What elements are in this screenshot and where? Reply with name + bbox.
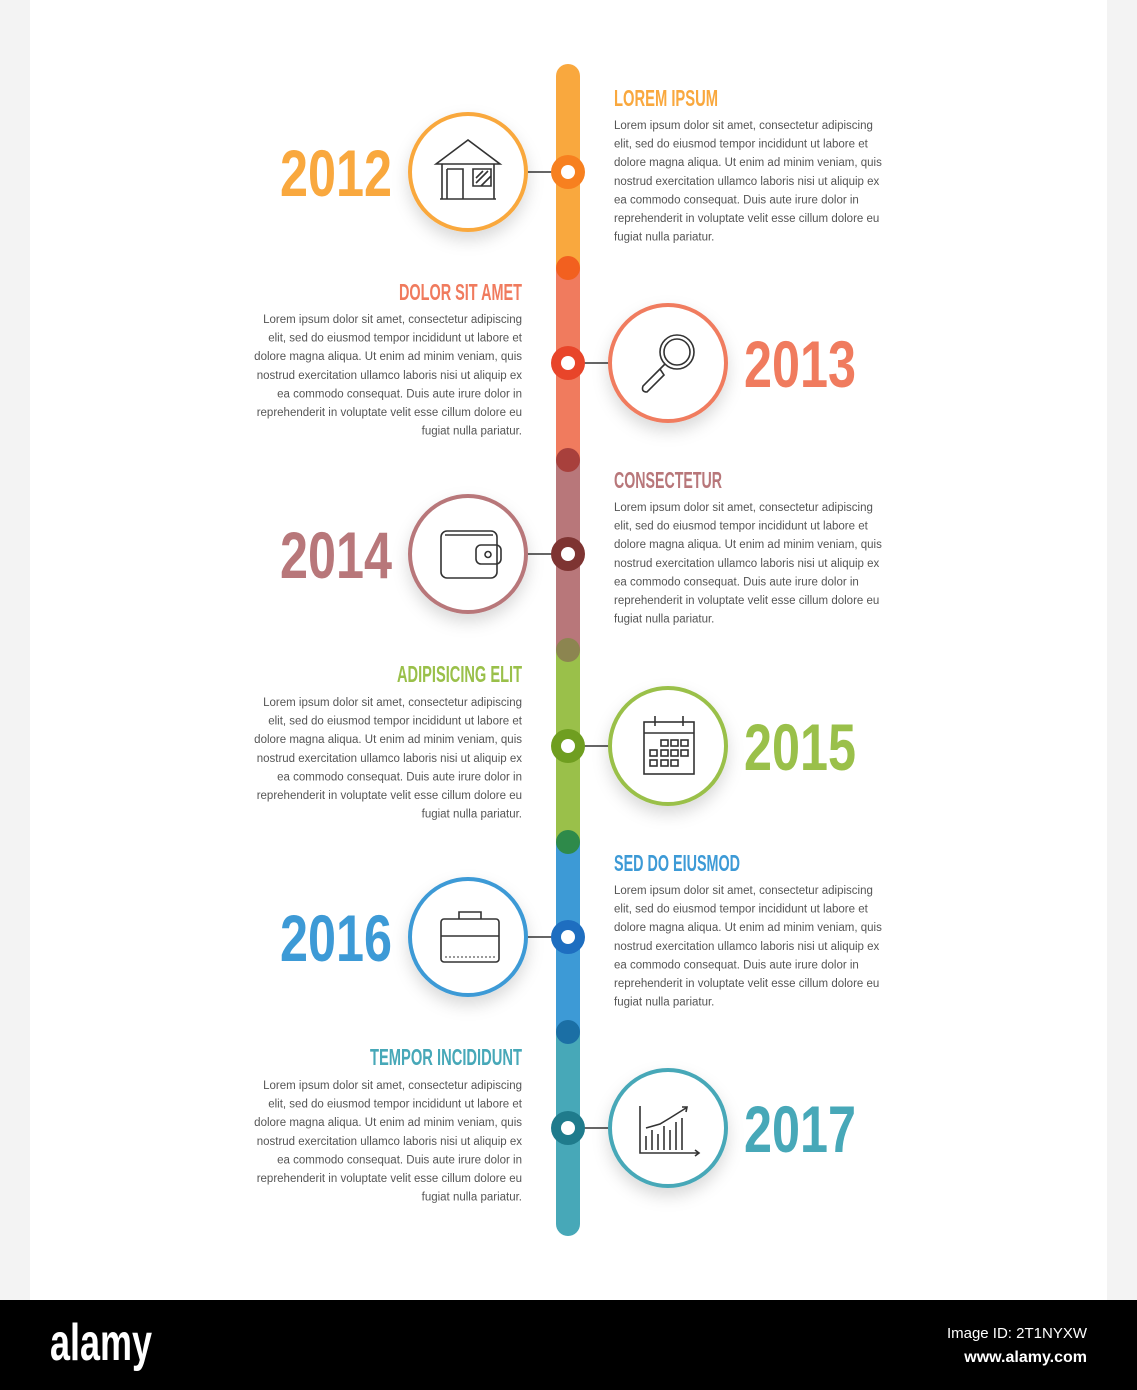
body text: reprehenderit in voluptate velit esse cillum dolore eu bbox=[257, 407, 522, 419]
heading: SED DO EIUSMOD bbox=[614, 850, 740, 876]
body text: reprehenderit in voluptate velit esse cillum dolore eu bbox=[257, 790, 522, 802]
heading: TEMPOR INCIDIDUNT bbox=[370, 1044, 522, 1070]
image id bbox=[947, 1325, 1087, 1366]
image id: www.alamy.com bbox=[964, 1349, 1087, 1366]
body text: Lorem ipsum dolor sit amet, consectetur adipiscing bbox=[263, 1080, 522, 1092]
body text: dolore magna aliqua. Ut enim ad minim veniam, quis bbox=[614, 539, 882, 551]
body text: reprehenderit in voluptate velit esse cillum dolore eu bbox=[614, 978, 879, 990]
body text: elit, sed do eiusmod tempor incididunt ut labore et bbox=[268, 1099, 523, 1111]
body text: fugiat nulla pariatur. bbox=[614, 232, 714, 244]
footer bar bbox=[0, 1300, 1137, 1390]
body text: dolore magna aliqua. Ut enim ad minim veniam, quis bbox=[614, 922, 882, 934]
image id: Image ID: 2T1NYXW bbox=[947, 1325, 1087, 1342]
body text: nostrud exercitation ullamco laboris nisi ut aliquip ex bbox=[257, 753, 522, 765]
body text: Lorem ipsum dolor sit amet, consectetur adipiscing bbox=[263, 697, 522, 709]
timeline nodes bbox=[551, 155, 585, 1145]
item 2013 bbox=[254, 279, 856, 438]
body text: fugiat nulla pariatur. bbox=[422, 809, 522, 821]
year 2017: 2017 bbox=[744, 1092, 856, 1166]
icon circle: wallet bbox=[410, 496, 526, 612]
body text: dolore magna aliqua. Ut enim ad minim veniam, quis bbox=[254, 734, 522, 746]
body text: elit, sed do eiusmod tempor incididunt ut labore et bbox=[614, 904, 869, 916]
year 2015: 2015 bbox=[744, 710, 856, 784]
body text: reprehenderit in voluptate velit esse cillum dolore eu bbox=[614, 595, 879, 607]
icon circle: house bbox=[410, 114, 526, 230]
icon circle: chart bbox=[610, 1070, 726, 1186]
icon circle: calendar bbox=[610, 688, 726, 804]
body text: elit, sed do eiusmod tempor incididunt ut labore et bbox=[268, 333, 523, 345]
body text: Lorem ipsum dolor sit amet, consectetur adipiscing bbox=[614, 502, 873, 514]
body text: dolore magna aliqua. Ut enim ad minim veniam, quis bbox=[614, 157, 882, 169]
item 2015 bbox=[254, 661, 856, 821]
body text: Lorem ipsum dolor sit amet, consectetur adipiscing bbox=[263, 314, 522, 326]
heading: LOREM IPSUM bbox=[614, 85, 718, 111]
year 2014: 2014 bbox=[280, 518, 392, 592]
heading: ADIPISICING ELIT bbox=[397, 661, 522, 687]
body text: elit, sed do eiusmod tempor incididunt ut labore et bbox=[268, 716, 523, 728]
body text: ea commodo consequat. Duis aute irure dolor in bbox=[614, 959, 859, 971]
icon circle: briefcase bbox=[410, 879, 526, 995]
item 2012 bbox=[280, 85, 882, 244]
body text: Lorem ipsum dolor sit amet, consectetur adipiscing bbox=[614, 885, 873, 897]
heading: CONSECTETUR bbox=[614, 467, 722, 493]
body text: nostrud exercitation ullamco laboris nisi ut aliquip ex bbox=[614, 176, 880, 188]
body text: ea commodo consequat. Duis aute irure dolor in bbox=[614, 576, 859, 588]
heading: DOLOR SIT AMET bbox=[399, 279, 522, 305]
body text: reprehenderit in voluptate velit esse cillum dolore eu bbox=[257, 1173, 522, 1185]
body text: ea commodo consequat. Duis aute irure dolor in bbox=[277, 771, 522, 783]
logo: alamy bbox=[50, 1314, 152, 1372]
body text: dolore magna aliqua. Ut enim ad minim veniam, quis bbox=[254, 1117, 522, 1129]
body text: fugiat nulla pariatur. bbox=[422, 1192, 522, 1204]
icon circle: magnifier bbox=[610, 305, 726, 421]
body text: fugiat nulla pariatur. bbox=[422, 426, 522, 438]
body text: elit, sed do eiusmod tempor incididunt ut labore et bbox=[614, 521, 869, 533]
body text: reprehenderit in voluptate velit esse cillum dolore eu bbox=[614, 213, 879, 225]
item 2016 bbox=[280, 850, 882, 1009]
body text: ea commodo consequat. Duis aute irure dolor in bbox=[277, 388, 522, 400]
item 2017 bbox=[254, 1044, 856, 1204]
body text: dolore magna aliqua. Ut enim ad minim veniam, quis bbox=[254, 351, 522, 363]
item 2014 bbox=[280, 467, 882, 626]
connector lines bbox=[526, 172, 610, 1128]
body text: ea commodo consequat. Duis aute irure dolor in bbox=[277, 1154, 522, 1166]
body text: fugiat nulla pariatur. bbox=[614, 997, 714, 1009]
year 2016: 2016 bbox=[280, 901, 392, 975]
body text: nostrud exercitation ullamco laboris nisi ut aliquip ex bbox=[614, 558, 880, 570]
year 2013: 2013 bbox=[744, 327, 856, 401]
body text: fugiat nulla pariatur. bbox=[614, 614, 714, 626]
year 2012: 2012 bbox=[280, 136, 392, 210]
body text: ea commodo consequat. Duis aute irure dolor in bbox=[614, 194, 859, 206]
body text: nostrud exercitation ullamco laboris nisi ut aliquip ex bbox=[257, 370, 522, 382]
body text: nostrud exercitation ullamco laboris nisi ut aliquip ex bbox=[614, 941, 880, 953]
body text: nostrud exercitation ullamco laboris nisi ut aliquip ex bbox=[257, 1136, 522, 1148]
timeline bar bbox=[556, 64, 580, 1236]
body text: Lorem ipsum dolor sit amet, consectetur adipiscing bbox=[614, 120, 873, 132]
body text: elit, sed do eiusmod tempor incididunt ut labore et bbox=[614, 139, 869, 151]
